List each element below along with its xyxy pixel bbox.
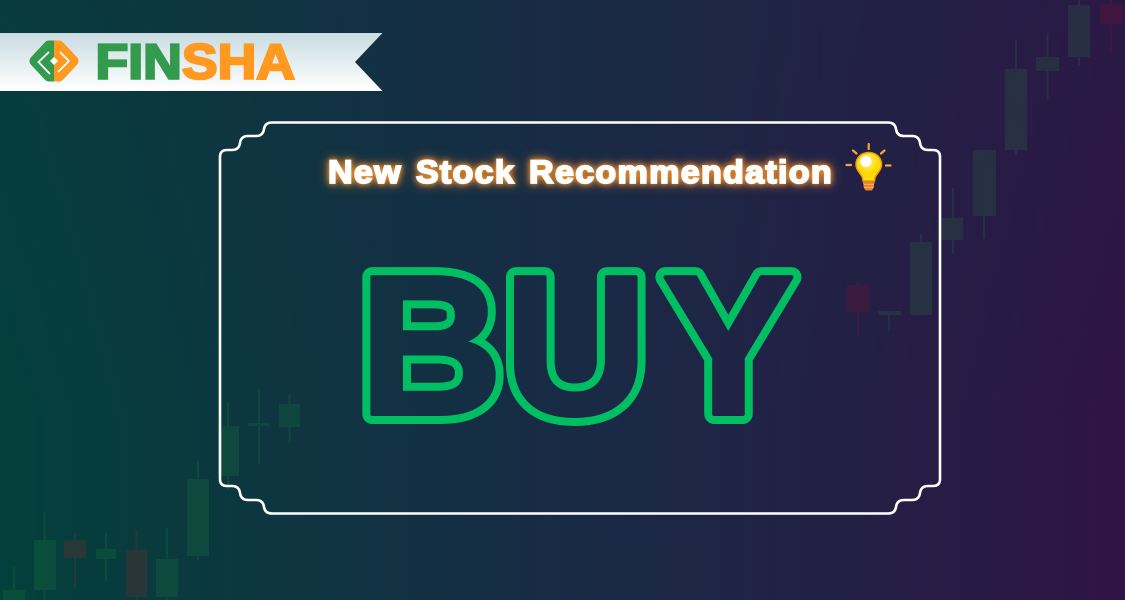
letter Y: Y	[662, 235, 795, 457]
letter U: U	[504, 235, 648, 457]
letter B: B	[359, 235, 503, 457]
icon: Finsha logo diamond	[35, 46, 73, 76]
letter B: B	[359, 235, 503, 457]
letter Y: Y	[662, 235, 795, 457]
BUY outlined lettering	[359, 235, 795, 457]
candlestick chart: bottom left	[3, 389, 300, 600]
letter U: U	[504, 235, 648, 457]
heading: New Stock Recommendation	[328, 154, 833, 190]
candlestick chart: top right	[847, 0, 1122, 335]
brand ribbon with logo	[0, 33, 382, 91]
logo wordmark: FINSHA	[96, 36, 295, 90]
icon: light bulb	[846, 144, 890, 190]
ribbon shape	[0, 33, 382, 91]
ticket frame	[220, 122, 940, 514]
